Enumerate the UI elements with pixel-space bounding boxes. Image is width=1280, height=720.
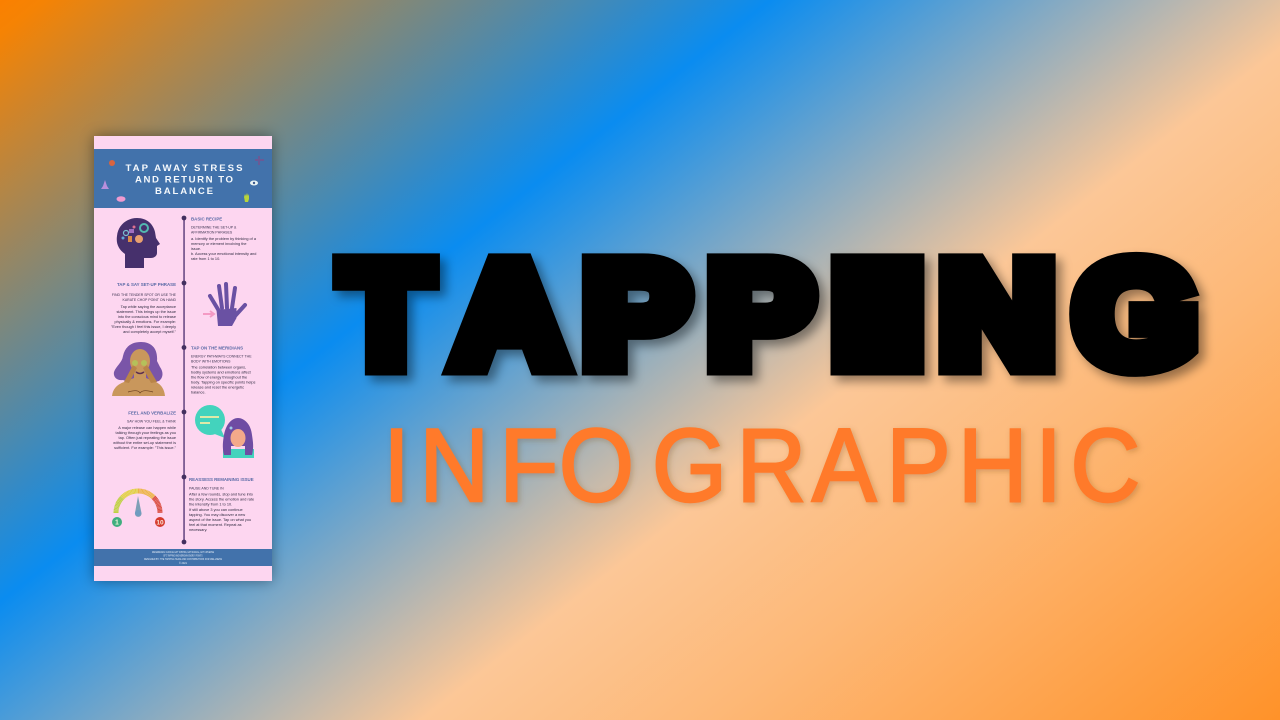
section: tap on the meridians: TAP ON THE MERIDIANS	[191, 346, 243, 350]
section: tap on the meridians: release and reset the energetic	[191, 386, 244, 390]
icon: intensity gauge	[112, 491, 165, 527]
section: tap and say set-up phrase: into the conscious mind to release	[118, 315, 176, 319]
footer band: DESIGNED BY: THE TAPPING TEAM AND CONTRIBUTORS FOR WELLNESS	[144, 558, 222, 561]
section: reassess remaining issue: aspect of the issue. Tap on what you	[189, 518, 251, 522]
section: feel and verbalize: without the entire set-up statement is	[113, 441, 176, 445]
infographic title: TAP AWAY STRESS	[126, 163, 243, 174]
infographic title: BALANCE	[155, 186, 214, 197]
icon: woman tapping face	[112, 342, 165, 396]
header icons	[101, 156, 264, 202]
section: tap and say set-up phrase: physically & emotions. For example:	[114, 320, 176, 324]
subtitle: INFOGRAPHIC: INFOGRAPHIC	[383, 408, 1140, 524]
icon: speech bubble and woman	[195, 405, 254, 458]
section: tap on the meridians: BODY WITH EMOTIONS	[191, 360, 231, 364]
section: reassess remaining issue	[189, 477, 254, 532]
section: reassess remaining issue: necessary.	[189, 528, 207, 532]
section: basic recipe	[191, 216, 257, 261]
main title: TAPPING: G	[1074, 233, 1197, 397]
icon: intensity gauge: 1	[115, 520, 119, 526]
section: tap and say set-up phrase: FIND THE TENDER SPOT OR USE THE	[112, 293, 177, 297]
section: basic recipe: issue.	[191, 247, 201, 251]
section: tap on the meridians: balance.	[191, 390, 206, 394]
icon: head with gears	[117, 218, 160, 268]
footer band: EFT, TAPPING AND MERIDIAN ENERGY POINTS	[164, 554, 203, 558]
section: tap and say set-up phrase: and completely accept myself."	[123, 330, 177, 334]
main title: TAPPING: P	[582, 233, 690, 397]
icon: intensity gauge: 10	[156, 520, 164, 526]
section: reassess remaining issue: After a few rounds, stop and tune into	[189, 492, 253, 496]
section: tap on the meridians: the flow of energy throughout the	[191, 376, 247, 380]
section: feel and verbalize: sufficient. For example: "This issue."	[114, 446, 177, 450]
section: reassess remaining issue: PAUSE AND TUNE IN	[189, 486, 224, 490]
section: basic recipe: b. Access your emotional intensity and	[191, 252, 256, 256]
section: tap on the meridians	[191, 346, 255, 394]
section: reassess remaining issue: feel at that moment. Repeat as	[189, 523, 242, 527]
main title: TAPPING: I	[832, 233, 923, 397]
section: tap and say set-up phrase	[111, 282, 177, 334]
section: tap on the meridians: ENERGY PATHWAYS CONNECT THE	[191, 354, 252, 358]
section: reassess remaining issue: the story. Access the emotion and rate	[189, 498, 254, 502]
main title: TAPPING: T	[341, 233, 431, 397]
section: tap and say set-up phrase: statement. This brings up the issue	[116, 310, 176, 314]
section: feel and verbalize: FEEL AND VERBALIZE	[128, 410, 176, 416]
section: tap and say set-up phrase: KARATE CHOP POINT ON HAND	[123, 298, 176, 302]
footer band: REFERENCES: CLINICAL EFT TAPPING, EFT MANUAL, EFT UNIVERSE	[152, 551, 214, 554]
section: tap and say set-up phrase: Tap while saying the acceptance	[121, 305, 176, 309]
section: feel and verbalize	[113, 410, 177, 450]
section: feel and verbalize: SAY HOW YOU FEEL & THINK	[127, 420, 177, 424]
infographic title: AND RETURN TO	[135, 174, 234, 186]
section: tap and say set-up phrase: TAP & SAY SET-UP PHRASE	[117, 282, 176, 287]
section: tap on the meridians: bodily systems and emotions affect	[191, 370, 252, 374]
main title: TAPPING: A	[453, 233, 566, 397]
panel background	[94, 136, 272, 581]
section: reassess remaining issue: If still above 3 you can continue	[189, 508, 243, 512]
infographic panel	[94, 136, 272, 581]
footer band	[94, 549, 272, 566]
footer band: © 2021	[179, 562, 188, 565]
section: basic recipe: a. Identify the problem by thinking of a	[191, 237, 257, 241]
main title: TAPPING: N	[939, 233, 1055, 397]
section: tap and say set-up phrase: "Even though I feel this issue, I deeply	[111, 325, 176, 329]
section: tap on the meridians: The correlation between organs,	[191, 366, 246, 370]
infographic title	[126, 163, 243, 197]
main title: TAPPING: P	[708, 233, 814, 397]
section: feel and verbalize: A major release can happen while	[118, 426, 176, 430]
header band	[94, 149, 272, 208]
timeline	[182, 216, 186, 544]
section: basic recipe: BASIC RECIPE	[191, 216, 222, 222]
section: basic recipe: rate from 1 to 10.	[191, 257, 220, 261]
icon: hand with arrow	[203, 284, 245, 326]
section: feel and verbalize: talking through your feelings as you	[116, 431, 176, 435]
section: basic recipe: DETERMINE THE SET-UP &	[191, 226, 237, 230]
section: basic recipe: AFFIRMATION PHRASES	[191, 230, 233, 234]
section: reassess remaining issue: REASSESS REMAINING ISSUE	[189, 477, 254, 482]
section: tap on the meridians: body. Tapping on specific points helps	[191, 380, 255, 384]
section: reassess remaining issue: tapping. You may discover a new	[189, 513, 245, 517]
section: reassess remaining issue: the intensity from 1 to 10.	[189, 502, 232, 506]
main title: TAPPING	[341, 233, 1197, 397]
section: feel and verbalize: tap. Often just repeating the issue	[119, 436, 176, 440]
section: basic recipe: memory or element involving the	[191, 242, 247, 246]
